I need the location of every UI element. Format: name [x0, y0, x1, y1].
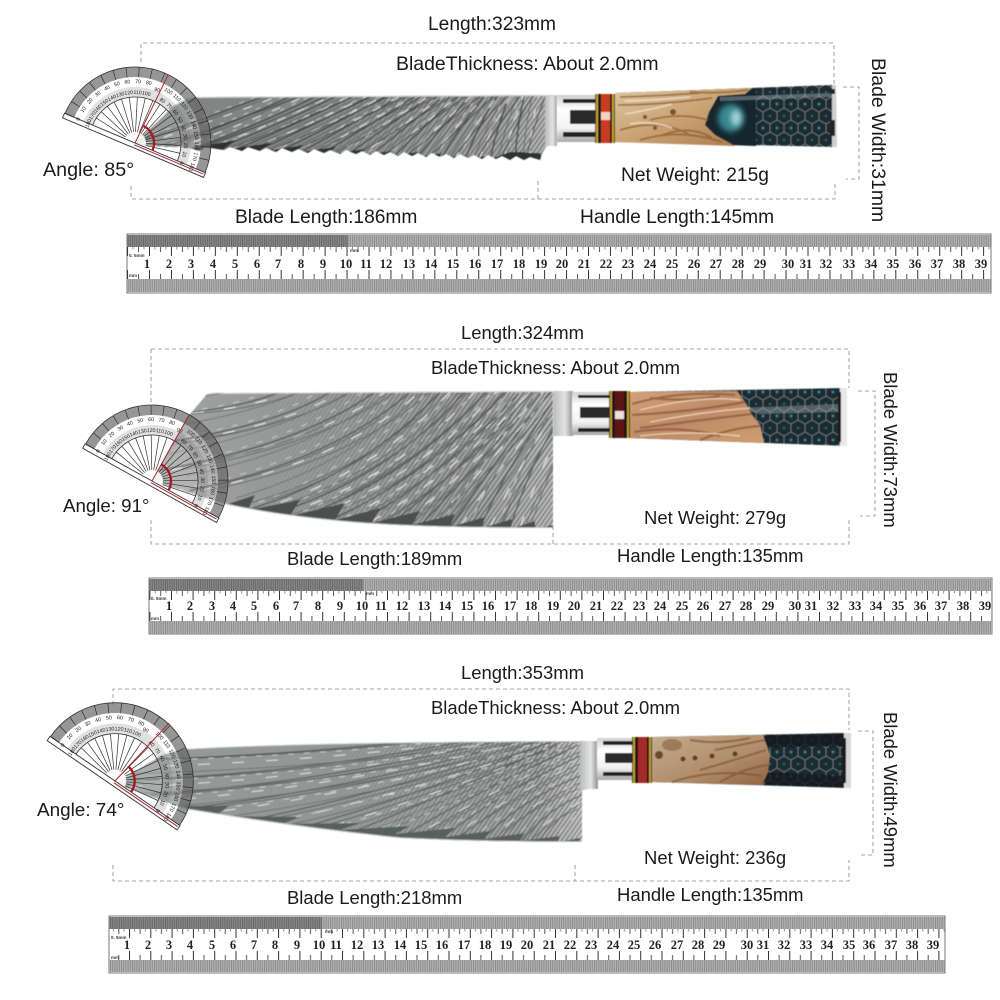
protractor: angle 85: 30 [181, 134, 188, 140]
protractor: angle 91: 130 [205, 454, 213, 464]
protractor: angle 85: 130 [115, 91, 125, 99]
label: angle 74: Angle: 74° [37, 800, 124, 821]
protractor: angle 74: 160 [172, 792, 180, 802]
ruler 2: 28 [740, 599, 752, 613]
ruler 2: 4 [230, 599, 237, 613]
ruler 2: 0. 5mm [151, 596, 167, 601]
ruler 3: 33 [800, 938, 812, 952]
protractor: angle 85: 90 [154, 87, 161, 94]
protractor: angle 91: 110 [155, 428, 164, 435]
ruler 3: 13 [372, 938, 384, 952]
protractor: angle 85: 150 [100, 98, 110, 108]
ruler 2: 7 [293, 599, 299, 613]
protractor: angle 74: 90 [142, 727, 149, 735]
ruler 3: 25 [628, 938, 640, 952]
ruler 3: 5 [209, 938, 215, 952]
ruler 3: 23 [585, 938, 597, 952]
ruler 1: 26 [688, 257, 700, 271]
protractor: angle 74: 10 [158, 798, 166, 806]
protractor: angle 91: 10 [195, 494, 203, 501]
ruler 3: 16 [436, 938, 448, 952]
protractor: angle 74: 80 [147, 740, 155, 749]
protractor: angle 91: 10 [100, 438, 109, 447]
ruler 2: 27 [719, 599, 731, 613]
protractor: angle 85: 50 [113, 81, 121, 88]
protractor: angle 91: 0 [192, 503, 199, 508]
protractor: angle 91: 120 [147, 428, 156, 434]
ruler 3: 30 [741, 938, 753, 952]
ruler 3: 1 [124, 938, 130, 952]
ruler 1: 13 [403, 257, 415, 271]
protractor: angle 85: 100 [163, 87, 173, 97]
protractor: angle 74: 60 [117, 715, 123, 722]
ruler 1: 20 [556, 257, 568, 271]
bolster [580, 741, 598, 792]
ruler 3: 0. 5mm [111, 935, 127, 940]
ruler 1: 19 [535, 257, 547, 271]
ruler 2: 37 [935, 599, 947, 613]
ruler 1: 10 [340, 257, 352, 271]
ruler 1: 27 [710, 257, 722, 271]
protractor: angle 91: 70 [158, 417, 165, 424]
ruler 3: 4 [187, 938, 194, 952]
spacer: silver and black [597, 738, 633, 780]
ruler 1: 37 [931, 257, 943, 271]
ruler 3: 29 [713, 938, 725, 952]
protractor: angle 91: 20 [108, 431, 116, 439]
ruler 1: 5 [232, 257, 238, 271]
protractor: angle 85: 130 [185, 110, 194, 121]
protractor: angle 74: 40 [163, 773, 170, 779]
ruler 2: 30 [789, 599, 801, 613]
protractor: angle 74: 130 [105, 726, 115, 733]
ruler 2: 1 [166, 599, 172, 613]
protractor: angle 85: 20 [86, 97, 95, 106]
protractor: angle 91: 170 [205, 496, 214, 506]
protractor: angle 74: 120 [114, 726, 124, 733]
ruler 1: 33 [843, 257, 855, 271]
ruler 2: 13 [418, 599, 430, 613]
ruler 1: 21 [578, 257, 590, 271]
protractor: angle 74: 50 [106, 715, 112, 722]
label: handle length: Handle Length:135mm [617, 545, 804, 566]
protractor: angle 91: 180 [201, 505, 210, 516]
ruler 3: 27 [671, 938, 683, 952]
protractor: angle 85: 180 [84, 118, 93, 129]
label: blade thickness: BladeThickness: About 2.0mm [431, 697, 680, 718]
ruler 1: 3 [188, 257, 194, 271]
protractor: angle 91: 70 [186, 444, 194, 452]
ruler 2: 29 [762, 599, 774, 613]
ruler 1: 32 [820, 257, 832, 271]
ruler 1: mm [129, 273, 137, 278]
ruler 2: 11 [375, 599, 387, 613]
ruler 3: 28 [692, 938, 704, 952]
blade: cleaver damascus [153, 390, 554, 528]
ruler 1: 39 [975, 257, 987, 271]
protractor: angle 91: 150 [210, 476, 216, 484]
panel: bread knife [43, 14, 991, 293]
dimension brackets: length and blade width [131, 43, 859, 199]
protractor: angle 85: 0 [75, 117, 82, 122]
protractor: angle 74: 180 [162, 811, 172, 822]
ruler 1: 24 [644, 257, 657, 271]
ruler 3: 7 [251, 938, 257, 952]
protractor: angle 74: 0 [154, 807, 161, 813]
protractor: angle 74: 70 [153, 747, 161, 755]
protractor: angle 74: 180 [68, 746, 78, 757]
ruler 2: 36 [914, 599, 926, 613]
protractor: angle 91: 80 [168, 420, 176, 427]
label: angle 91: Angle: 91° [63, 495, 149, 516]
protractor: angle 85: 30 [94, 90, 102, 98]
panel: chef knife [37, 662, 945, 973]
protractor: angle 74: 140 [174, 770, 181, 780]
ruler 3: 6 [230, 938, 236, 952]
protractor: angle 74: 110 [123, 727, 133, 735]
protractor: angle 74: 170 [168, 802, 177, 812]
label: blade thickness: BladeThickness: About 2.0mm [396, 53, 659, 75]
ruler 2: 2 [187, 599, 193, 613]
ruler 1: 14 [425, 257, 438, 271]
ring stack: dark red and gold [609, 391, 630, 438]
protractor: angle 74: 70 [127, 717, 134, 724]
ruler 1: 29 [754, 257, 766, 271]
ruler 2 [149, 578, 992, 634]
protractor: angle 74: 40 [95, 717, 102, 724]
ruler 3: mm [325, 929, 333, 934]
protractor: angle 91: 160 [209, 486, 216, 495]
ruler 2: 34 [870, 599, 883, 613]
ruler 1: 30 [782, 257, 794, 271]
ruler 2: 9 [337, 599, 343, 613]
protractor: angle 74: 30 [163, 782, 170, 788]
protractor: angle 91: 140 [129, 430, 139, 439]
protractor: angle 91: 160 [114, 438, 125, 448]
ruler 2: 38 [957, 599, 969, 613]
ruler 2: 26 [697, 599, 709, 613]
ruler 1: 8 [298, 257, 304, 271]
ruler 1: 1 [144, 257, 150, 271]
ruler 2: 3 [209, 599, 215, 613]
protractor: angle 91: 180 [104, 451, 113, 462]
protractor: angle 74: 100 [131, 730, 142, 739]
protractor: angle 85: 40 [103, 85, 111, 93]
ruler 2: 25 [676, 599, 688, 613]
ruler 1: 25 [666, 257, 678, 271]
ruler 2: 5 [251, 599, 257, 613]
protractor: angle 85: 100 [141, 90, 151, 98]
protractor: angle 85: 120 [179, 101, 189, 112]
protractor: angle 85: 70 [165, 102, 173, 111]
protractor: angle 74: 50 [161, 764, 168, 771]
ruler 2: 19 [547, 599, 559, 613]
ruler 3: 10 [313, 938, 325, 952]
label: angle 85: Angle: 85° [43, 159, 134, 181]
ruler 3: 21 [543, 938, 555, 952]
label: handle length: Handle Length:135mm [617, 884, 804, 905]
ruler 2: 16 [482, 599, 494, 613]
heading: overall length: Length:324mm [461, 322, 584, 343]
dimension brackets: length and blade width [113, 689, 873, 881]
ruler 3: 39 [927, 938, 939, 952]
protractor: angle 85: 120 [124, 90, 134, 97]
ruler 3: 35 [843, 938, 855, 952]
protractor: angle 85: 40 [179, 125, 187, 132]
protractor: angle 74: 80 [137, 720, 145, 728]
protractor: angle 74: 20 [161, 790, 168, 798]
protractor: angle 85: 160 [93, 104, 104, 114]
ruler 3: mm [111, 955, 119, 960]
protractor: angle 85: 180 [187, 162, 196, 172]
ruler 2: 12 [396, 599, 408, 613]
heading: overall length: Length:323mm [428, 14, 556, 35]
protractor: angle 85 [63, 43, 235, 177]
ruler 3: 37 [885, 938, 897, 952]
label: net weight: Net Weight: 279g [644, 507, 786, 528]
ruler 3 [109, 916, 945, 973]
ruler 3: 18 [479, 938, 491, 952]
ruler 3: 3 [166, 938, 172, 952]
ruler 1: 35 [887, 257, 899, 271]
ruler 1: 23 [622, 257, 634, 271]
ruler 3: 38 [906, 938, 918, 952]
ring stack: red and gold [595, 94, 615, 143]
ruler 1: 6 [254, 257, 260, 271]
ruler 3: 31 [757, 938, 769, 952]
protractor: angle 74: 30 [84, 720, 92, 728]
ruler 1: 16 [469, 257, 481, 271]
ruler 3: 17 [458, 938, 470, 952]
ruler 3: 14 [394, 938, 407, 952]
protractor: angle 91: 170 [108, 444, 118, 455]
protractor: angle 91: 120 [199, 444, 209, 455]
ruler 2: 17 [504, 599, 516, 613]
protractor: angle 74: 0 [60, 742, 67, 748]
ruler 3: 32 [778, 938, 790, 952]
protractor: angle 91: 60 [191, 451, 199, 459]
protractor: angle 91: 20 [198, 485, 205, 492]
ruler 1: mm [350, 248, 358, 253]
ruler 1: 18 [513, 257, 525, 271]
ruler 1: 11 [360, 257, 372, 271]
protractor: angle 85: 140 [189, 120, 197, 130]
ruler 3: 15 [415, 938, 427, 952]
ruler 1: 2 [166, 257, 172, 271]
ruler 2: mm [366, 591, 374, 596]
handle: wood and dark hex resin [553, 388, 847, 446]
protractor: angle 91: 150 [121, 433, 132, 443]
protractor: angle 74: 130 [171, 759, 180, 769]
label: blade thickness: BladeThickness: About 2.0mm [431, 357, 680, 378]
ruler 2: 14 [439, 599, 452, 613]
ruler 1: 17 [491, 257, 503, 271]
protractor: angle 85: 80 [145, 80, 152, 87]
ruler 1: 12 [380, 257, 392, 271]
ruler 2: 6 [273, 599, 279, 613]
protractor: angle 85: 50 [176, 116, 184, 124]
dimension brackets: length and blade width [151, 349, 875, 544]
protractor: angle 91: 80 [179, 438, 188, 446]
ruler 2: 39 [979, 599, 991, 613]
ruler 2: mm [151, 616, 159, 621]
ruler 3: 24 [607, 938, 620, 952]
protractor: angle 74 [47, 672, 224, 830]
protractor: angle 91: 110 [193, 436, 203, 446]
protractor: angle 74: 60 [157, 755, 165, 763]
ruler 2: 22 [611, 599, 623, 613]
ruler 3: 2 [145, 938, 151, 952]
protractor: angle 85: 20 [182, 142, 188, 149]
protractor: angle 85: 60 [171, 109, 179, 117]
protractor: angle 74: 10 [66, 733, 74, 741]
protractor: angle 85: 0 [178, 160, 184, 165]
ruler 2: 10 [356, 599, 368, 613]
label: blade width: Blade Width:49mm [880, 712, 901, 868]
ruler 1: 36 [909, 257, 921, 271]
ruler 1: 28 [732, 257, 744, 271]
ruler 1 [127, 234, 991, 293]
label: blade width: Blade Width:31mm [867, 58, 889, 222]
protractor: angle 74: 100 [154, 731, 164, 741]
protractor: angle 85: 170 [191, 152, 198, 162]
ruler 1: 15 [447, 257, 459, 271]
protractor: angle 91: 130 [138, 428, 147, 436]
blade: chef damascus [118, 740, 583, 842]
bolster [553, 391, 573, 436]
protractor: angle 85: 80 [158, 97, 166, 105]
ruler 2: 33 [849, 599, 861, 613]
protractor: angle 74: 170 [73, 740, 84, 750]
protractor: angle 74: 140 [96, 727, 106, 735]
protractor: angle 91: 60 [148, 417, 154, 423]
ruler 3: 20 [521, 938, 533, 952]
ruler 3: 19 [500, 938, 512, 952]
protractor: angle 74: 150 [88, 730, 98, 739]
ring stack: red and gold [632, 737, 652, 783]
ruler 1: 7 [275, 257, 281, 271]
protractor: angle 85: 150 [192, 131, 199, 140]
ruler 1: 0. 5mm [129, 253, 145, 258]
spacer: silver and black [557, 95, 596, 142]
ruler 2: 20 [568, 599, 580, 613]
panel: cleaver [63, 322, 992, 634]
ruler 3: 26 [649, 938, 661, 952]
protractor: angle 91: 30 [199, 477, 205, 483]
protractor: angle 91: 40 [126, 420, 134, 428]
handle: wood and dark hex resin [580, 733, 851, 792]
handle: wood and blue resin [557, 85, 837, 147]
ruler 2: 18 [525, 599, 537, 613]
protractor: angle 85: 110 [133, 90, 142, 96]
label: blade length: Blade Length:189mm [287, 548, 462, 569]
spacer: silver and black [572, 392, 610, 435]
protractor: angle 91: 90 [176, 427, 183, 435]
ruler 3: 36 [863, 938, 875, 952]
label: blade width: Blade Width:73mm [880, 372, 901, 528]
label: blade length: Blade Length:186mm [235, 207, 417, 228]
ruler 2: 23 [633, 599, 645, 613]
protractor: angle 91: 100 [163, 429, 173, 438]
ruler 3: 9 [294, 938, 300, 952]
ruler 1: 34 [865, 257, 878, 271]
protractor: angle 85: 60 [124, 79, 131, 86]
protractor: angle 85: 10 [180, 151, 187, 158]
label: net weight: Net Weight: 236g [644, 847, 786, 868]
protractor: angle 74: 110 [161, 739, 171, 750]
protractor: angle 85: 140 [107, 94, 118, 103]
protractor: angle 91: 100 [185, 429, 196, 439]
protractor: angle 74: 20 [74, 726, 83, 734]
protractor: angle 74: 150 [174, 781, 181, 791]
protractor: angle 85: 170 [88, 110, 98, 121]
label: handle length: Handle Length:145mm [580, 207, 774, 228]
protractor: angle 91: 0 [95, 449, 102, 454]
ruler 1: 4 [210, 257, 217, 271]
label: net weight: Net Weight: 215g [621, 165, 769, 186]
label: blade length: Blade Length:218mm [287, 887, 462, 908]
ruler 2: 32 [827, 599, 839, 613]
protractor: angle 91: 40 [198, 468, 205, 475]
ruler 2: 21 [590, 599, 602, 613]
ruler 2: 8 [315, 599, 321, 613]
blade: serrated damascus [136, 94, 558, 161]
ruler 2: 31 [805, 599, 817, 613]
ruler 3: 11 [330, 938, 342, 952]
ruler 1: 9 [320, 257, 326, 271]
ruler 3: 34 [821, 938, 834, 952]
ruler 1: 38 [953, 257, 965, 271]
ruler 2: 35 [892, 599, 904, 613]
protractor: angle 74: 120 [167, 749, 176, 759]
protractor: angle 91: 30 [117, 425, 125, 433]
heading: overall length: Length:353mm [461, 662, 584, 683]
protractor: angle 74: 160 [80, 734, 91, 744]
protractor: angle 85: 110 [171, 93, 182, 103]
protractor: angle 91: 50 [137, 418, 144, 425]
ruler 3: 12 [351, 938, 363, 952]
protractor: angle 91: 140 [208, 465, 216, 474]
protractor: angle 91 [83, 377, 256, 522]
protractor: angle 85: 160 [193, 142, 199, 151]
ruler 1: 22 [600, 257, 612, 271]
ruler 3: 8 [272, 938, 278, 952]
ruler 2: 24 [654, 599, 667, 613]
ruler 3: 22 [564, 938, 576, 952]
protractor: angle 91: 50 [195, 459, 203, 467]
ruler 2: 15 [461, 599, 473, 613]
protractor: angle 85: 10 [80, 106, 88, 114]
ruler 1: 31 [800, 257, 812, 271]
protractor: angle 85: 70 [135, 79, 141, 85]
